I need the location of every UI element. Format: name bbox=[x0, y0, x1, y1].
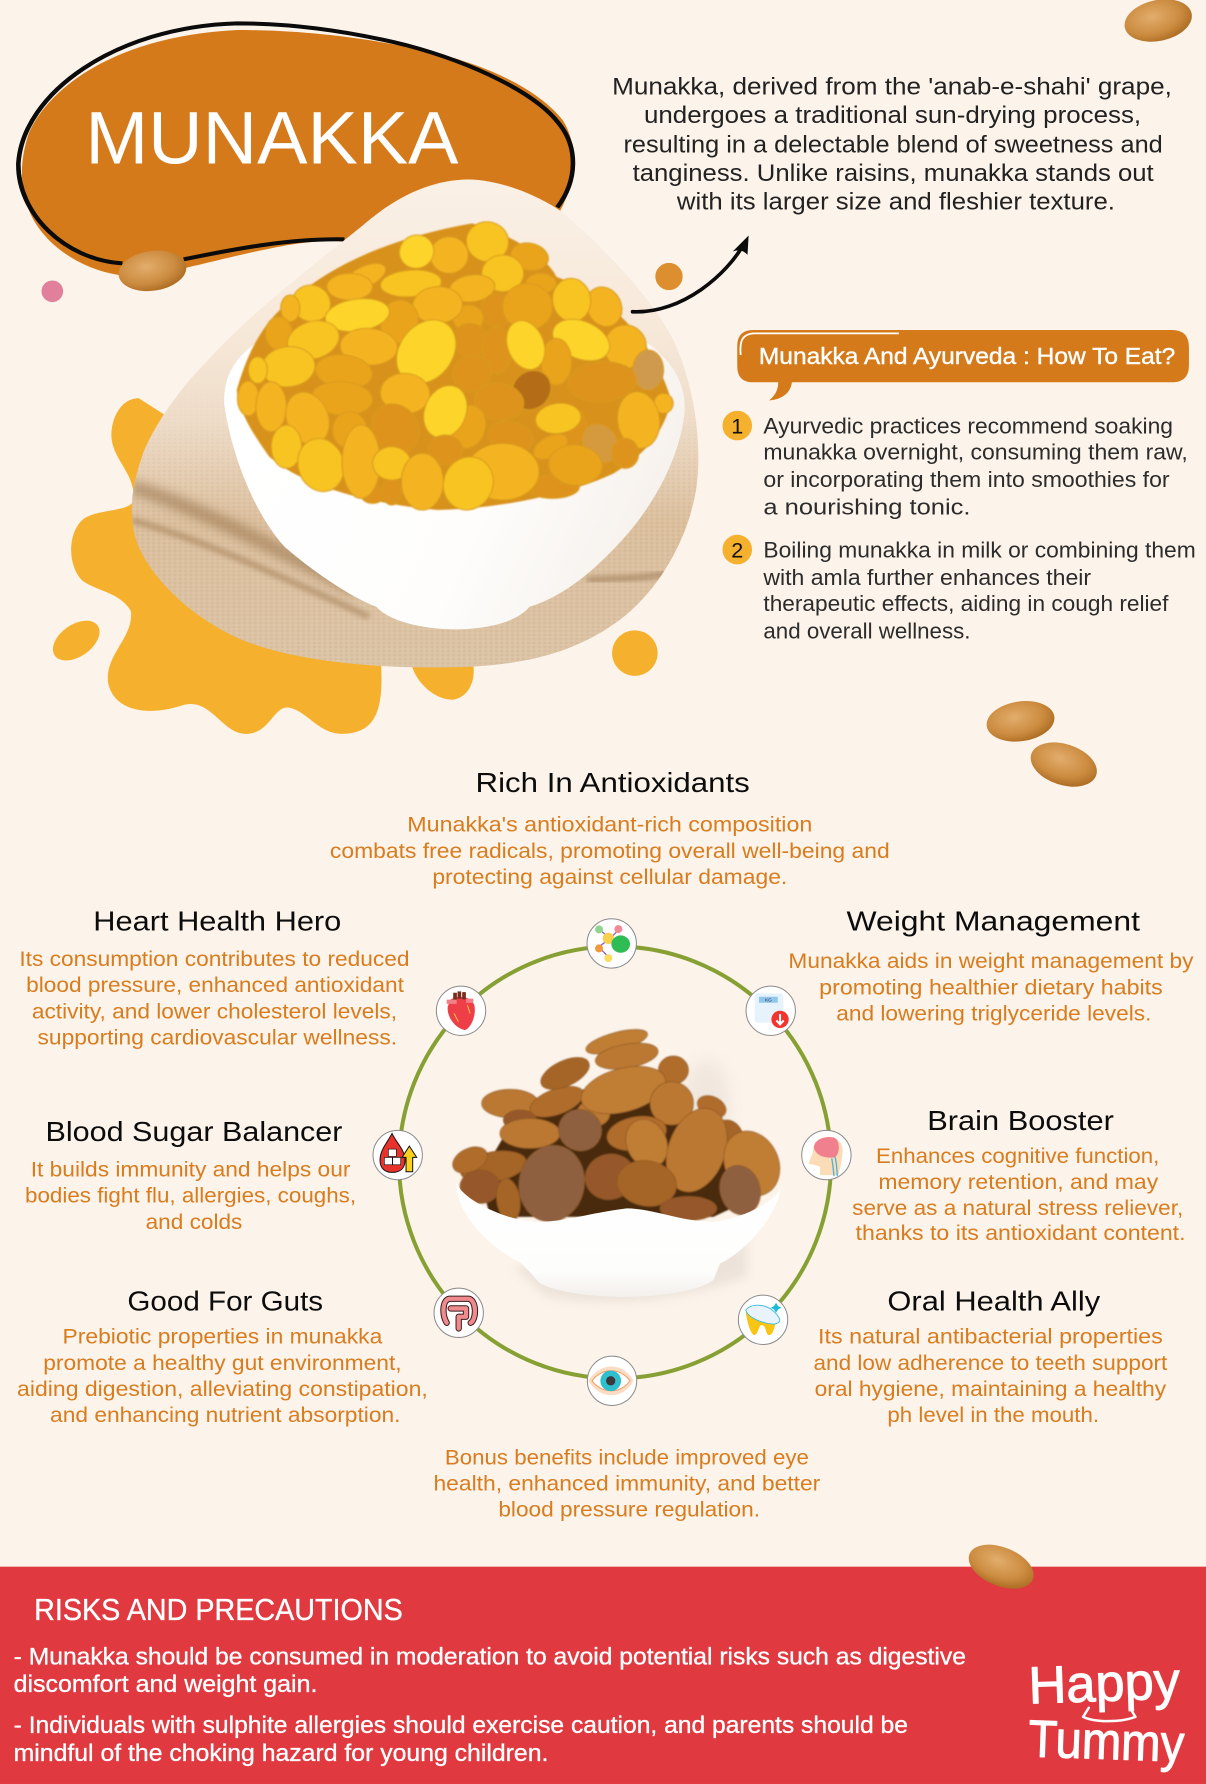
brown raisins in bowl bbox=[448, 1025, 790, 1302]
title blob bbox=[18, 23, 574, 276]
step 1: 1 bbox=[731, 413, 743, 438]
icon: heart bbox=[436, 986, 486, 1035]
benefit: weight management: Munakka aids in weight management by bbox=[788, 948, 1194, 973]
step 2 bbox=[722, 535, 1196, 643]
benefit: rich in antioxidants: protecting against cellular damage. bbox=[432, 864, 787, 889]
benefit: brain booster: thanks to its antioxidant content. bbox=[856, 1220, 1186, 1245]
benefit: brain booster: Enhances cognitive function, bbox=[876, 1143, 1159, 1168]
risks heading: RISKS AND PRECAUTIONS bbox=[34, 1592, 403, 1627]
yellow paint splash bbox=[46, 398, 658, 734]
benefit: heart health hero: blood pressure, enhanced antioxidant bbox=[26, 972, 404, 997]
benefits ring with bowl and icons bbox=[373, 919, 851, 1405]
step 1: munakka overnight, consuming them raw, bbox=[763, 440, 1188, 465]
step 1: a nourishing tonic. bbox=[763, 494, 970, 519]
benefit: rich in antioxidants: Munakka's antioxidant-rich composition bbox=[407, 812, 812, 837]
logo: happy tummy: Tummy bbox=[1028, 1710, 1186, 1774]
benefit: oral health ally bbox=[813, 1286, 1167, 1427]
intro paragraph: undergoes a traditional sun-drying process, bbox=[644, 102, 1141, 129]
icon: intestines bbox=[434, 1288, 483, 1337]
step 1: Ayurvedic practices recommend soaking bbox=[763, 413, 1173, 438]
icon: brain bbox=[802, 1130, 851, 1180]
benefit: rich in antioxidants: Rich In Antioxidants bbox=[476, 767, 750, 798]
risks text: mindful of the choking hazard for young children. bbox=[14, 1740, 548, 1767]
risks text: discomfort and weight gain. bbox=[14, 1671, 317, 1698]
benefit: good for guts bbox=[17, 1286, 428, 1427]
intro paragraph: with its larger size and fleshier texture. bbox=[676, 188, 1115, 215]
benefit: bonus: health, enhanced immunity, and better bbox=[433, 1470, 820, 1495]
benefit: weight management: and lowering triglyceride levels. bbox=[836, 1001, 1151, 1026]
benefit: bonus bbox=[433, 1444, 820, 1522]
step 2: and overall wellness. bbox=[763, 618, 970, 643]
benefit: good for guts: Prebiotic properties in munakka bbox=[63, 1324, 383, 1349]
orange dot bbox=[655, 263, 683, 290]
icon: weighing scale: KG bbox=[765, 997, 772, 1002]
raisin over risks panel edge bbox=[962, 1536, 1040, 1597]
risks text: - Individuals with sulphite allergies should exercise caution, and parents should be bbox=[14, 1712, 908, 1739]
benefit: bonus: blood pressure regulation. bbox=[498, 1497, 760, 1522]
benefit: weight management: Weight Management bbox=[846, 906, 1140, 937]
benefit: brain booster: Brain Booster bbox=[927, 1105, 1114, 1136]
step 1 bbox=[722, 411, 1188, 519]
pink dot bbox=[42, 280, 63, 302]
step 1: or incorporating them into smoothies for bbox=[763, 467, 1170, 492]
benefit: oral health ally: and low adherence to teeth support bbox=[813, 1350, 1167, 1375]
risks text: - Munakka should be consumed in moderation to avoid potential risks such as digestive bbox=[14, 1644, 966, 1671]
benefit: blood sugar balancer: and colds bbox=[146, 1209, 243, 1234]
intro paragraph bbox=[612, 73, 1172, 215]
icon: tooth bbox=[738, 1295, 788, 1344]
step 2: with amla further enhances their bbox=[762, 565, 1092, 590]
logo: happy tummy bbox=[1028, 1652, 1186, 1774]
risks text bbox=[14, 1644, 966, 1767]
benefit: blood sugar balancer: It builds immunity and helps our bbox=[31, 1156, 350, 1181]
benefit: oral health ally: oral hygiene, maintaining a healthy bbox=[815, 1376, 1166, 1401]
step 2: Boiling munakka in milk or combining them bbox=[763, 538, 1196, 563]
ribbon heading: how to eat bbox=[737, 330, 1189, 400]
benefit: good for guts: aiding digestion, alleviating constipation, bbox=[17, 1376, 428, 1401]
benefit: oral health ally: Its natural antibacterial properties bbox=[818, 1324, 1163, 1349]
benefit: heart health hero: activity, and lower cholesterol levels, bbox=[32, 998, 397, 1023]
white bowl bbox=[224, 337, 685, 629]
benefit: heart health hero: supporting cardiovascular wellness. bbox=[38, 1024, 397, 1049]
benefit: heart health hero bbox=[19, 906, 410, 1049]
benefit: blood sugar balancer: bodies fight flu, allergies, coughs, bbox=[25, 1183, 356, 1208]
intro paragraph: Munakka, derived from the 'anab-e-shahi' grape, bbox=[612, 73, 1172, 100]
benefit: heart health hero: Its consumption contributes to reduced bbox=[19, 946, 410, 971]
benefit: oral health ally: Oral Health Ally bbox=[887, 1286, 1100, 1317]
benefit: bonus: Bonus benefits include improved eye bbox=[445, 1444, 809, 1469]
icon: blood sugar drop bbox=[373, 1130, 422, 1180]
benefit: brain booster: memory retention, and may bbox=[878, 1169, 1158, 1194]
icon: weighing scale bbox=[746, 986, 795, 1035]
benefit: oral health ally: ph level in the mouth. bbox=[887, 1402, 1099, 1427]
benefit: good for guts: promote a healthy gut environment, bbox=[43, 1350, 402, 1375]
benefit: rich in antioxidants: combats free radicals, promoting overall well-being and bbox=[330, 838, 890, 863]
arrow bbox=[633, 236, 749, 312]
white bowl bbox=[457, 1183, 780, 1297]
icon: antioxidants molecule bbox=[587, 919, 636, 968]
ribbon heading: how to eat: Munakka And Ayurveda : How To Eat? bbox=[759, 343, 1175, 369]
logo: happy tummy: Happy bbox=[1028, 1652, 1182, 1716]
intro paragraph: tanginess. Unlike raisins, munakka stands out bbox=[633, 160, 1154, 187]
title: MUNAKKA bbox=[85, 96, 459, 179]
step 2: therapeutic effects, aiding in cough relief bbox=[763, 591, 1169, 616]
benefit: rich in antioxidants bbox=[330, 767, 890, 889]
photo: golden raisins in white bowl bbox=[120, 170, 720, 680]
intro paragraph: resulting in a delectable blend of sweetness and bbox=[623, 131, 1163, 158]
raisin heap bbox=[237, 219, 673, 513]
icon: eye bbox=[587, 1356, 637, 1405]
benefit: weight management bbox=[788, 906, 1194, 1026]
benefit: good for guts: and enhancing nutrient absorption. bbox=[50, 1402, 400, 1427]
benefit: heart health hero: Heart Health Hero bbox=[93, 906, 341, 937]
benefit: brain booster bbox=[852, 1105, 1186, 1245]
risks panel bbox=[0, 1567, 1206, 1784]
benefit: good for guts: Good For Guts bbox=[127, 1286, 323, 1317]
step 2: 2 bbox=[731, 538, 743, 563]
benefit: weight management: promoting healthier dietary habits bbox=[819, 974, 1163, 999]
benefit: brain booster: serve as a natural stress reliever, bbox=[852, 1195, 1183, 1220]
benefit: blood sugar balancer: Blood Sugar Balancer bbox=[46, 1116, 342, 1147]
benefit: blood sugar balancer bbox=[25, 1116, 356, 1234]
raisin decorations bbox=[116, 0, 1196, 795]
